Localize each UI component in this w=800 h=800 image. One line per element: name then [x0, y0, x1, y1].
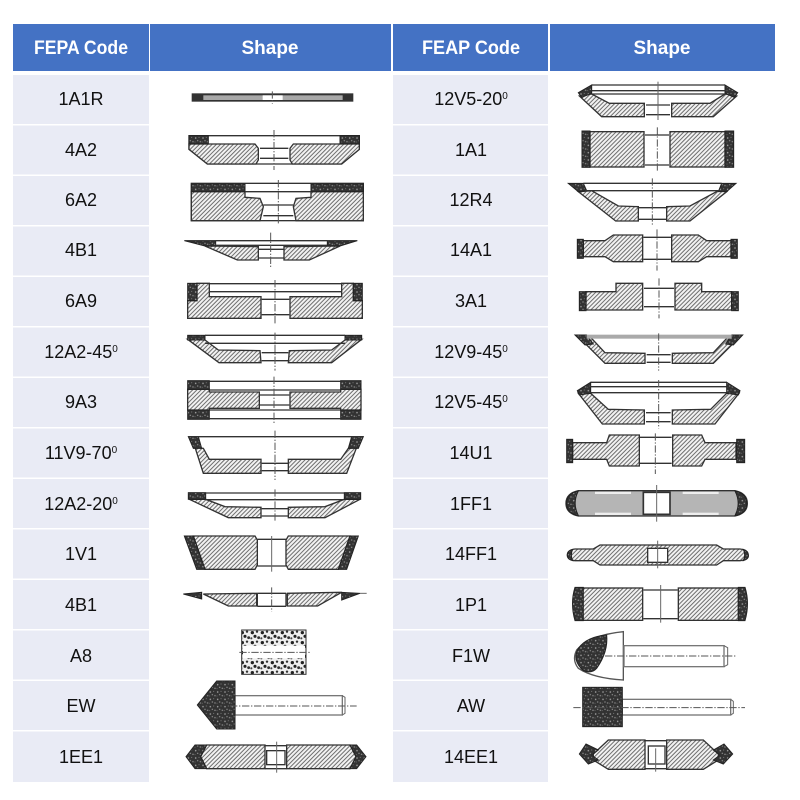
code 3A1: 3A1	[455, 291, 487, 311]
shape: 14A1	[577, 229, 737, 271]
code EW	[13, 681, 149, 730]
code 12V5-20	[393, 75, 548, 124]
shape: 12V5-20	[578, 82, 738, 120]
code 6A2: 6A2	[65, 190, 97, 210]
header: FEPA Code: FEPA Code	[34, 38, 128, 59]
code 12A2-45	[13, 328, 149, 376]
code 12A2-20	[13, 479, 149, 528]
code 9A3: 9A3	[65, 392, 97, 412]
shape: 1FF1	[566, 485, 747, 522]
code 11V9-70: 0	[112, 445, 118, 456]
header: Shape, left table: Shape	[241, 38, 299, 59]
shape: 4B1	[184, 233, 357, 268]
code AW: AW	[457, 696, 485, 716]
code 1A1R	[13, 75, 149, 124]
code 1V1: 1V1	[65, 544, 97, 564]
code 12V5-45	[393, 378, 548, 427]
shape: 3A1	[579, 278, 738, 318]
shape: 1A1R	[192, 91, 353, 104]
code 14A1	[393, 226, 548, 276]
code 12A2-45: 12A2-45	[44, 342, 112, 362]
code 1A1	[393, 126, 548, 174]
code 6A9	[13, 277, 149, 326]
code 12V5-45: 12V5-45	[434, 392, 502, 412]
code 1P1: 1P1	[455, 595, 487, 615]
code 14FF1: 14FF1	[445, 544, 497, 564]
shape: AW	[573, 687, 745, 727]
shape: EW	[197, 681, 357, 729]
shape: 4A2	[189, 130, 359, 170]
code 4B1, second	[13, 580, 149, 629]
code 1EE1: 1EE1	[59, 747, 103, 767]
code 11V9-70	[13, 428, 149, 478]
shape: F1W	[575, 632, 736, 680]
shape: 14FF1	[567, 541, 748, 568]
shape: 4B1, second	[183, 587, 367, 612]
header: FEAP Code: FEAP Code	[422, 38, 520, 59]
code 4B1: 4B1	[65, 240, 97, 260]
code A8: A8	[70, 646, 92, 666]
code 12V5-20: 12V5-20	[434, 89, 502, 109]
code F1W: F1W	[452, 646, 490, 666]
FEPA code cells	[13, 75, 149, 782]
code 4B1, second: 4B1	[65, 595, 97, 615]
code AW	[393, 681, 548, 730]
shape: 1EE1	[186, 742, 366, 773]
code 1EE1	[13, 732, 149, 782]
code 12V5-45: 0	[502, 394, 508, 405]
code 12V5-20: 0	[502, 91, 508, 102]
header: FEAP Code	[393, 24, 548, 71]
shape: 14U1	[567, 433, 745, 474]
code 1FF1: 1FF1	[450, 494, 492, 514]
shape: 12V9-45	[575, 333, 743, 371]
shape: 6A2	[191, 180, 363, 225]
code EW: EW	[66, 696, 96, 716]
code 12A2-45: 0	[112, 344, 118, 355]
shape: 6A9	[188, 280, 362, 323]
code 4B1	[13, 226, 149, 276]
code 12A2-20: 12A2-20	[44, 494, 112, 514]
code 3A1	[393, 277, 548, 326]
code 4A2: 4A2	[65, 140, 97, 160]
code 14U1	[393, 428, 548, 478]
shape: 12A2-20	[188, 489, 361, 522]
code 14EE1	[393, 732, 548, 782]
code 12R4: 12R4	[449, 190, 493, 210]
code 14U1: 14U1	[449, 443, 493, 463]
shape: 1A1	[582, 127, 734, 172]
code 14EE1: 14EE1	[444, 747, 498, 767]
code 6A9: 6A9	[65, 291, 97, 311]
shape: 11V9-70	[188, 431, 363, 480]
shape: 9A3	[188, 377, 361, 423]
code 12V9-45: 0	[502, 344, 508, 355]
FEAP code cells	[393, 75, 548, 782]
header: FEPA Code	[13, 24, 149, 71]
code 1A1: 1A1	[455, 140, 487, 160]
code 12R4	[393, 176, 548, 225]
code 11V9-70: 11V9-70	[45, 443, 112, 463]
shape: 1P1	[572, 585, 747, 623]
code F1W	[393, 630, 548, 680]
shape: 12A2-45	[188, 333, 362, 371]
shape: 12R4	[568, 178, 736, 225]
code 6A2	[13, 176, 149, 225]
code 12V9-45	[393, 328, 548, 376]
header: Shape, left table	[150, 24, 391, 71]
code 14FF1	[393, 530, 548, 578]
code 1P1	[393, 580, 548, 629]
code 1V1	[13, 530, 149, 578]
shape: 12V5-45	[577, 380, 740, 428]
code A8	[13, 630, 149, 680]
shape: 1V1	[184, 536, 358, 572]
header: Shape, right table: Shape	[633, 38, 691, 59]
code 1A1R: 1A1R	[58, 89, 104, 109]
code 9A3	[13, 378, 149, 427]
code 12V9-45: 12V9-45	[434, 342, 502, 362]
header: Shape, right table	[550, 24, 775, 71]
code 14A1: 14A1	[450, 240, 492, 260]
code 12A2-20: 0	[112, 496, 118, 507]
code 4A2	[13, 126, 149, 174]
code 1FF1	[393, 479, 548, 528]
shape: 14EE1	[579, 740, 733, 772]
shape: A8	[239, 630, 311, 674]
